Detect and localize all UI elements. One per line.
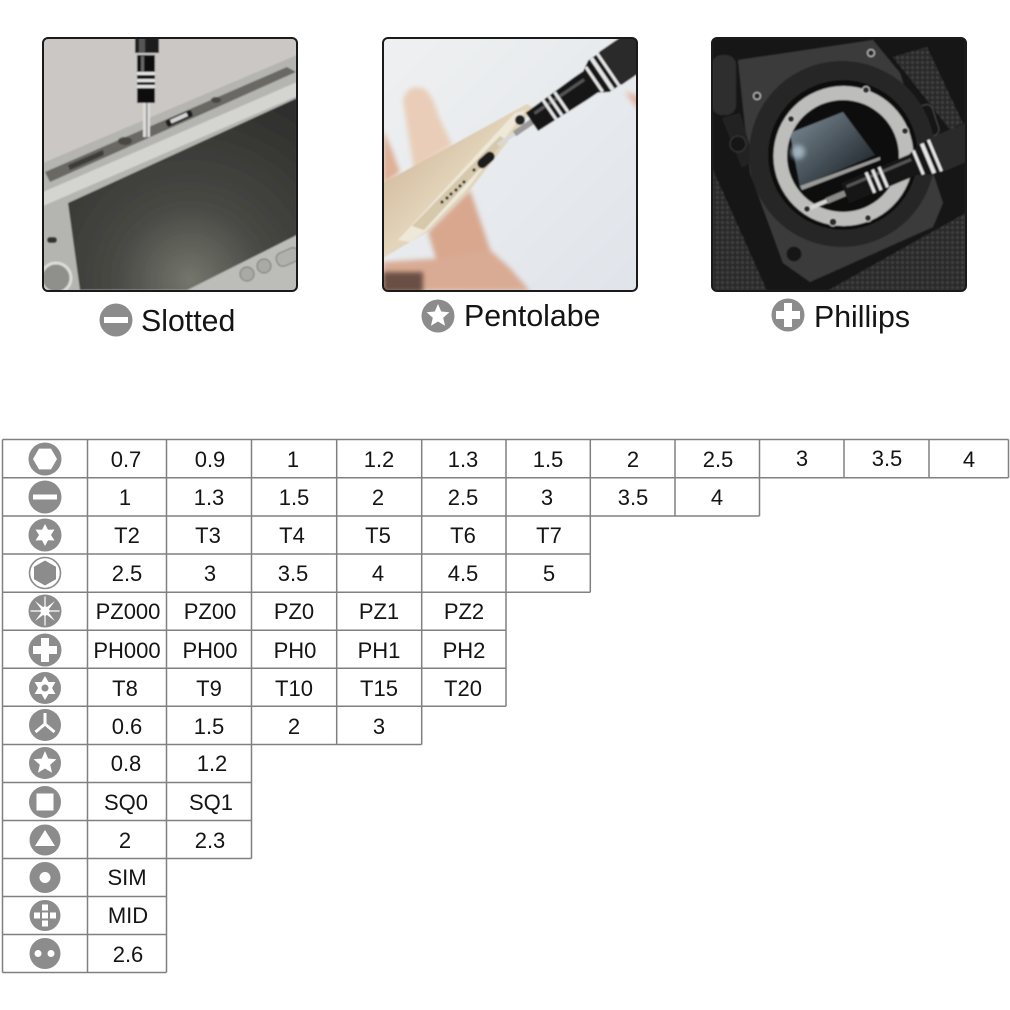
row: phillips: PH1 bbox=[358, 638, 400, 663]
row: torx: T6 bbox=[450, 523, 476, 548]
row: hex socket bbox=[30, 558, 555, 588]
row: hex socket: 2.5 bbox=[112, 561, 142, 586]
row: slotted: 2.5 bbox=[448, 485, 478, 510]
row: tri-wing: 3 bbox=[373, 714, 385, 739]
row: hex socket: 5 bbox=[543, 561, 555, 586]
row: sim bbox=[30, 862, 147, 893]
row: tri-wing: 0.6 bbox=[112, 714, 142, 739]
label: pentolabe: Pentolabe bbox=[464, 300, 600, 333]
row: torx bbox=[28, 518, 562, 552]
row: torx: T3 bbox=[195, 523, 221, 548]
row: slotted: 4 bbox=[711, 485, 723, 510]
label: phillips bbox=[772, 298, 910, 334]
row: phillips: PH00 bbox=[182, 638, 238, 663]
row: slotted: 1.5 bbox=[279, 485, 309, 510]
row: security torx bbox=[29, 672, 482, 704]
row: hex: 1 bbox=[287, 447, 299, 472]
row: hex: 0.7 bbox=[111, 447, 141, 472]
row: hex socket: 3 bbox=[204, 561, 216, 586]
row: slotted: 3 bbox=[541, 485, 553, 510]
row: hex: 2.5 bbox=[703, 447, 733, 472]
table: bit sizes bbox=[2, 440, 1008, 972]
row: phillips: PH000 bbox=[93, 638, 161, 663]
row: hex: 1.3 bbox=[448, 447, 478, 472]
row: pozidriv: PZ1 bbox=[359, 599, 399, 624]
row: pozidriv: PZ00 bbox=[184, 599, 236, 624]
row: torx: T5 bbox=[365, 523, 391, 548]
row: pozidriv: PZ0 bbox=[274, 599, 314, 624]
row: hex: 1.5 bbox=[533, 447, 563, 472]
row: mid bbox=[30, 900, 148, 931]
row: triangle: 2 bbox=[119, 828, 131, 853]
row: square: SQ1 bbox=[189, 790, 233, 815]
row: tri-wing bbox=[29, 709, 385, 741]
row: triangle bbox=[30, 824, 225, 856]
row: square bbox=[29, 786, 233, 818]
row: pentastar bbox=[29, 747, 227, 779]
row: sim: SIM bbox=[107, 865, 147, 890]
row: tri-wing: 2 bbox=[288, 714, 300, 739]
panel: pentolabe photo bbox=[383, 29, 655, 292]
row: mid: MID bbox=[108, 903, 148, 928]
row: phillips bbox=[28, 634, 485, 666]
row: slotted bbox=[28, 480, 723, 514]
label: slotted bbox=[100, 304, 235, 338]
row: hex: 4 bbox=[963, 447, 975, 472]
label: slotted: Slotted bbox=[141, 305, 235, 338]
row: security torx: T9 bbox=[196, 676, 222, 701]
row: slotted: 1 bbox=[119, 485, 131, 510]
row: hex socket: 3.5 bbox=[278, 561, 308, 586]
row: phillips: PH2 bbox=[443, 638, 485, 663]
row: pentastar: 1.2 bbox=[197, 751, 227, 776]
row: security torx: T15 bbox=[360, 676, 398, 701]
panel: phillips photo bbox=[712, 38, 980, 291]
row: pentastar: 0.8 bbox=[111, 751, 141, 776]
row: security torx: T20 bbox=[444, 676, 482, 701]
row: hex socket: 4 bbox=[372, 561, 384, 586]
row: square: SQ0 bbox=[104, 790, 148, 815]
row: slotted: 2 bbox=[372, 485, 384, 510]
row: triangle: 2.3 bbox=[195, 828, 225, 853]
row: security torx: T8 bbox=[112, 676, 138, 701]
row: torx: T2 bbox=[114, 523, 140, 548]
label: phillips: Phillips bbox=[814, 301, 910, 334]
row: torx: T7 bbox=[536, 523, 562, 548]
row: tri-wing: 1.5 bbox=[194, 714, 224, 739]
row: pozidriv: PZ000 bbox=[96, 599, 160, 624]
row: hex: 0.9 bbox=[195, 447, 225, 472]
row: hex: 2 bbox=[627, 447, 639, 472]
row: two-hole bbox=[30, 938, 143, 969]
row: hex bbox=[28, 442, 975, 476]
panel: slotted photo bbox=[41, 38, 302, 293]
row: hex: 1.2 bbox=[364, 447, 394, 472]
row: hex: 3.5 bbox=[872, 446, 902, 471]
row: two-hole: 2.6 bbox=[113, 942, 143, 967]
row: phillips: PH0 bbox=[274, 638, 316, 663]
row: pozidriv: PZ2 bbox=[444, 599, 484, 624]
row: security torx: T10 bbox=[275, 676, 313, 701]
row: pozidriv bbox=[28, 594, 484, 628]
row: slotted: 3.5 bbox=[618, 485, 648, 510]
row: torx: T4 bbox=[279, 523, 305, 548]
row: hex socket: 4.5 bbox=[448, 561, 478, 586]
row: slotted: 1.3 bbox=[194, 485, 224, 510]
row: hex: 3 bbox=[796, 446, 808, 471]
